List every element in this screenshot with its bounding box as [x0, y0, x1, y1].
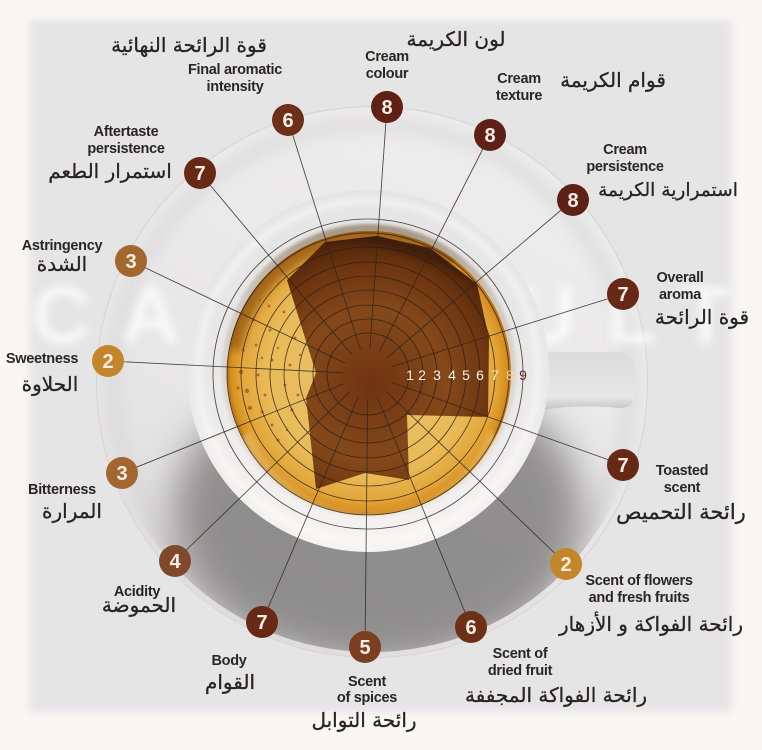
label: toasted scent: رائحة التحميص: [616, 500, 746, 524]
scale numbers: 3: [433, 367, 441, 383]
score: sweetness: [92, 345, 124, 377]
scale numbers: 8: [506, 367, 514, 383]
score: spices: 5: [359, 637, 371, 659]
label: cream colour: لون الكريمة: [406, 27, 506, 51]
label: spices: [311, 674, 417, 732]
scale numbers: 1: [406, 367, 414, 383]
score: aftertaste persistence: [184, 157, 216, 189]
score: aftertaste persistence: 7: [194, 163, 206, 185]
label: bitterness: المرارة: [42, 499, 102, 523]
crema spots: [236, 299, 301, 442]
score: dried fruit: [455, 611, 487, 643]
score: dried fruit: 6: [465, 617, 477, 639]
score: sweetness: 2: [102, 351, 114, 373]
scale numbers: 7: [491, 367, 499, 383]
score: acidity: [159, 545, 191, 577]
scale numbers: 4: [448, 367, 456, 383]
cup handle: [530, 352, 635, 412]
score: acidity: 4: [169, 551, 181, 573]
label: bitterness: [28, 482, 102, 523]
scale numbers: 9: [519, 367, 527, 383]
label: overall aroma: Overall: [656, 270, 704, 286]
label: spices: of spices: [337, 690, 397, 706]
label: cream persistence: Cream: [603, 142, 647, 158]
label: body: [205, 653, 255, 694]
score: toasted scent: [607, 449, 639, 481]
label: astringency: [22, 238, 102, 276]
score: toasted scent: 7: [617, 455, 629, 477]
label: flowers and fresh fruits: [558, 573, 743, 636]
label: astringency: الشدة: [37, 252, 87, 276]
label: final aromatic intensity: Final aromatic: [188, 62, 282, 78]
label: final aromatic intensity: قوة الرائحة النهائية: [111, 33, 267, 57]
label: sweetness: الحلاوة: [22, 372, 78, 396]
label: overall aroma: [655, 270, 749, 329]
score: final aromatic intensity: [272, 104, 304, 136]
saucer: [96, 106, 648, 665]
score: bitterness: [106, 457, 138, 489]
score: astringency: 3: [125, 251, 137, 273]
score: cream persistence: [557, 184, 589, 216]
score: astringency: [115, 245, 147, 277]
label: spices: رائحة التوابل: [311, 708, 417, 732]
score: body: [246, 606, 278, 638]
score: overall aroma: 7: [617, 284, 629, 306]
label: cream colour: [365, 27, 506, 82]
score: final aromatic intensity: 6: [282, 110, 294, 132]
label: overall aroma: aroma: [659, 287, 702, 303]
radar polygon: [287, 230, 489, 489]
label: cream texture: [496, 68, 666, 104]
label: aftertaste persistence: Aftertaste: [94, 124, 159, 140]
label: cream texture: texture: [496, 88, 542, 104]
label: toasted scent: Toasted: [656, 463, 708, 479]
label: final aromatic intensity: intensity: [207, 79, 264, 95]
shaded upper edge: [230, 231, 458, 354]
radar spokes: [108, 107, 623, 647]
label: body: القوام: [205, 670, 255, 694]
watermark: CAFE CULT: [32, 270, 760, 361]
score: cream persistence: 8: [567, 190, 579, 212]
scale numbers: 5: [462, 367, 470, 383]
cup shadow on saucer: [173, 365, 583, 665]
label: final aromatic intensity: [111, 33, 282, 95]
label: flowers and fresh fruits: رائحة الفواكة و الأزهار: [558, 612, 743, 636]
score: body: 7: [256, 612, 268, 634]
label: cream colour: colour: [366, 66, 409, 82]
label: aftertaste persistence: [48, 124, 172, 183]
label: sweetness: Sweetness: [6, 351, 78, 367]
cup: [187, 190, 549, 552]
label: bitterness: Bitterness: [28, 482, 96, 498]
score: bitterness: 3: [116, 463, 128, 485]
scale numbers: [406, 367, 527, 383]
label: flowers and fresh fruits: Scent of flowers: [585, 573, 693, 589]
label: cream colour: Cream: [365, 49, 409, 65]
score: cream colour: [371, 91, 403, 123]
score: flowers and fresh fruits: 2: [560, 554, 572, 576]
label: toasted scent: [616, 463, 746, 524]
scale numbers: 6: [476, 367, 484, 383]
label: cream persistence: استمرارية الكريمة: [598, 180, 738, 201]
label: dried fruit: [465, 646, 647, 707]
coffee surface: [227, 231, 511, 515]
score: overall aroma: [607, 278, 639, 310]
label: acidity: الحموضة: [102, 593, 176, 617]
label: cream texture: قوام الكريمة: [560, 68, 666, 92]
score: cream colour: 8: [381, 97, 393, 119]
label: dried fruit: dried fruit: [488, 663, 553, 679]
label: acidity: Acidity: [114, 584, 160, 600]
scale numbers: 2: [418, 367, 426, 383]
score: spices: [349, 631, 381, 663]
label: dried fruit: رائحة الفواكة المجففة: [465, 683, 647, 707]
label: spices: Scent: [348, 674, 386, 690]
label: dried fruit: Scent of: [493, 646, 548, 662]
score: flowers and fresh fruits: [550, 548, 582, 580]
radar rings: [213, 219, 523, 529]
label: astringency: Astringency: [22, 238, 102, 254]
score: cream texture: 8: [484, 125, 496, 147]
label: sweetness: [6, 351, 78, 396]
label: cream persistence: [586, 142, 738, 201]
label: cream texture: Cream: [497, 71, 541, 87]
label: cream persistence: persistence: [586, 159, 664, 175]
label: aftertaste persistence: persistence: [87, 141, 165, 157]
pale foam band: [242, 430, 497, 515]
label: toasted scent: scent: [664, 480, 701, 496]
label: flowers and fresh fruits: and fresh fruits: [589, 590, 690, 606]
label: body: Body: [211, 653, 247, 669]
score: cream texture: [474, 119, 506, 151]
label: overall aroma: قوة الرائحة: [655, 305, 749, 329]
label: aftertaste persistence: استمرار الطعم: [48, 159, 172, 183]
